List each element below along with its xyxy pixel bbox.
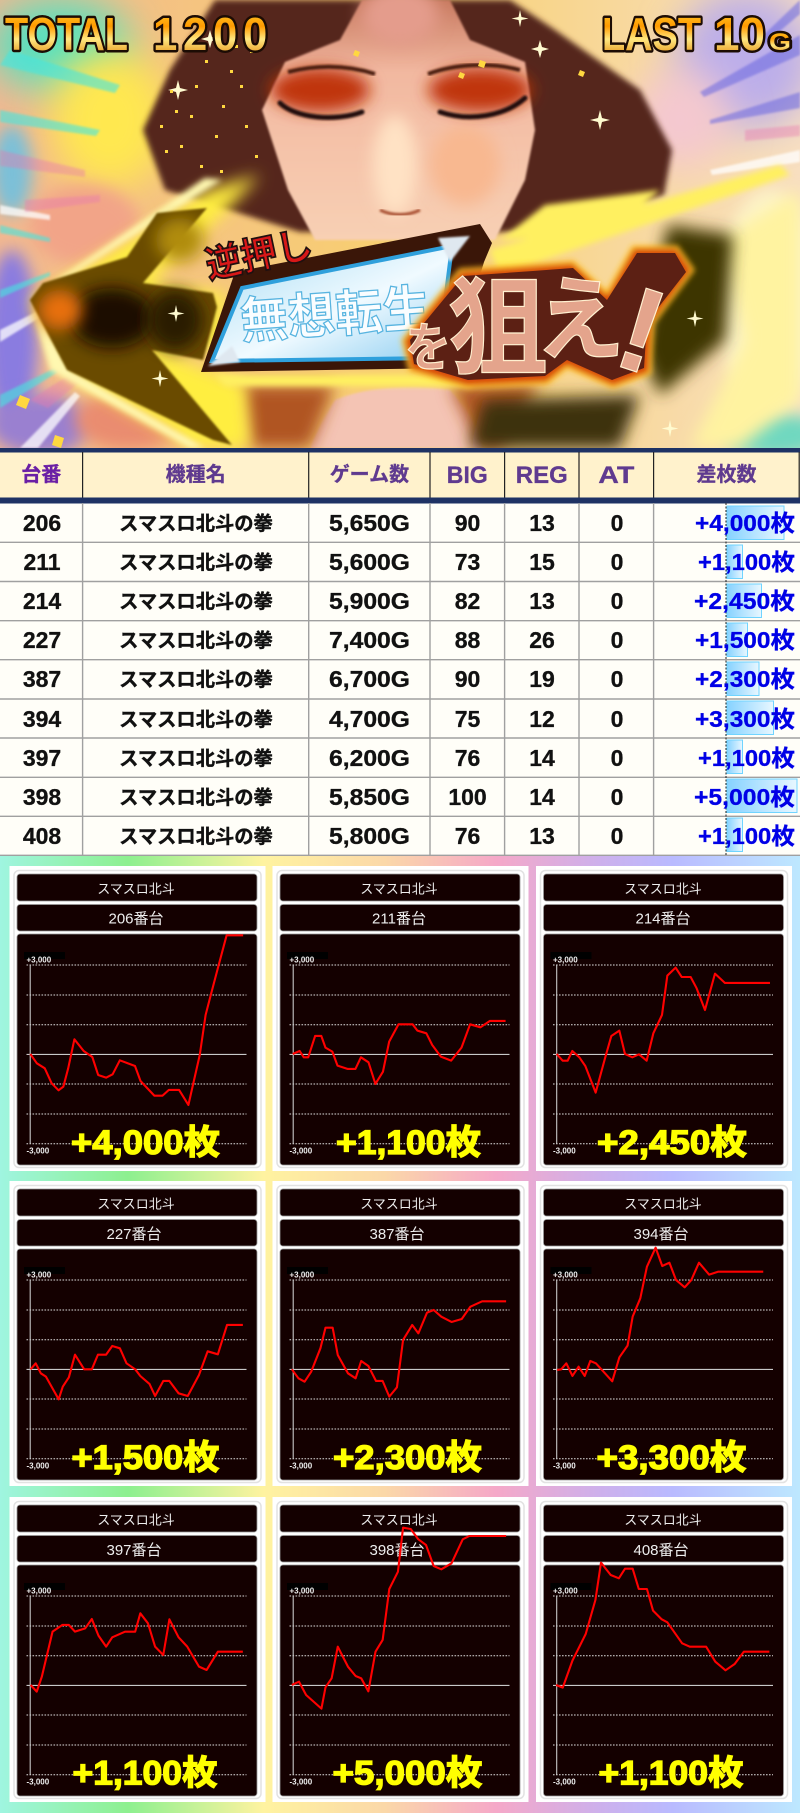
row 397: スマスロ北斗の拳 <box>119 748 273 770</box>
data table <box>0 448 800 856</box>
panel: chart 397: -3,000 <box>26 1778 50 1786</box>
row 398: 0 <box>611 784 623 810</box>
counter: TOTAL 1200: TOTAL <box>5 8 128 60</box>
panel: chart 211 <box>272 866 528 1171</box>
table header: AT <box>598 462 635 489</box>
panel: chart 206: -3,000 <box>26 1146 50 1156</box>
slogan: を狙え!: 狙 <box>448 268 548 389</box>
row 211 <box>23 549 795 575</box>
arrow right side <box>690 190 800 448</box>
row 397: 397 <box>23 745 61 771</box>
row 214: 0 <box>611 588 623 614</box>
row 394: スマスロ北斗の拳 <box>119 709 273 731</box>
panel: chart 394: +3,300枚 <box>596 1439 746 1477</box>
row 387: スマスロ北斗の拳 <box>119 669 273 691</box>
counter: LAST 10G: 10 <box>714 8 765 60</box>
arrow body <box>30 208 232 445</box>
row 211: スマスロ北斗の拳 <box>119 552 273 574</box>
panel: chart 398: +3,000 <box>290 1586 315 1596</box>
row 227: 0 <box>611 627 623 653</box>
row 214: +2,450枚 <box>694 588 795 614</box>
panel: chart 211: +3,000 <box>290 956 315 964</box>
slogan: を狙え! <box>403 247 693 400</box>
panel: chart 408: +1,100枚 <box>598 1754 744 1792</box>
counter: TOTAL 1200 <box>5 8 273 60</box>
row 206: 5,650G <box>329 510 410 536</box>
table header: ゲーム数 <box>330 463 409 486</box>
panel: chart 408: +3,000 <box>553 1586 578 1596</box>
row 227: 88 <box>455 627 480 653</box>
row 214 <box>23 588 795 614</box>
row 397 <box>23 745 795 771</box>
row 206: 0 <box>611 510 623 536</box>
row 227 <box>23 627 795 653</box>
row 206 <box>23 510 795 536</box>
row 408: 76 <box>455 823 480 849</box>
panel: chart 206 <box>10 866 266 1171</box>
row 408 <box>23 823 795 849</box>
row 387 <box>23 666 795 692</box>
sparkles <box>152 10 704 437</box>
row 394: +3,300枚 <box>695 706 795 732</box>
row 211: 0 <box>611 549 623 575</box>
hero artwork <box>0 0 800 457</box>
row 206: 90 <box>455 510 480 536</box>
counter: TOTAL 1200: 1200 <box>153 8 273 60</box>
row 387: 90 <box>455 666 480 692</box>
rays <box>0 0 800 448</box>
row 214: スマスロ北斗の拳 <box>119 591 273 613</box>
panel: chart 206: スマスロ北斗 <box>97 882 175 896</box>
panel: chart 227: -3,000 <box>26 1462 50 1470</box>
row 211: +1,100枚 <box>698 549 795 575</box>
row 206: +4,000枚 <box>695 510 795 536</box>
row 387: +2,300枚 <box>695 666 795 692</box>
row 214: 214 <box>23 588 61 614</box>
panel: chart 214: -3,000 <box>553 1146 576 1156</box>
slogan: を狙え!: を <box>405 320 451 378</box>
panel: chart 211: スマスロ北斗 <box>360 882 438 896</box>
row 408: 0 <box>611 823 623 849</box>
banner: 無想転生 <box>201 224 492 372</box>
panel: chart 397: +3,000 <box>26 1586 52 1596</box>
eyes <box>280 98 525 118</box>
panel: chart 211: +1,100枚 <box>336 1124 481 1162</box>
slogan: を狙え!: え <box>535 270 625 372</box>
panel: chart 214: スマスロ北斗 <box>624 882 702 896</box>
hands <box>310 387 482 448</box>
row 398: 14 <box>529 784 555 810</box>
panel: chart 394: スマスロ北斗 <box>624 1196 702 1212</box>
panel: chart 206: 206番台 <box>108 910 164 928</box>
row 387: 6,700G <box>329 666 410 692</box>
row 397: 0 <box>611 745 623 771</box>
panel: chart 408: スマスロ北斗 <box>624 1512 702 1528</box>
row 211: 5,600G <box>329 549 410 575</box>
panel: chart 397: +1,100枚 <box>72 1754 218 1792</box>
panel: chart 398: -3,000 <box>290 1778 313 1786</box>
counter: LAST 10G <box>602 8 791 60</box>
row 397: 76 <box>455 745 480 771</box>
panel: chart 214 <box>536 866 792 1171</box>
row 227: 227 <box>23 627 61 653</box>
difference bars <box>727 506 797 852</box>
eyebrows <box>288 65 520 74</box>
table grid <box>0 503 800 856</box>
row 214: 5,900G <box>329 588 410 614</box>
row 394: 12 <box>529 706 555 732</box>
row 211: 15 <box>529 549 555 575</box>
panel: chart 227: 227番台 <box>106 1226 162 1243</box>
row 398: スマスロ北斗の拳 <box>119 787 273 809</box>
panel: chart 397: スマスロ北斗 <box>97 1512 175 1528</box>
row 408: 408 <box>23 823 61 849</box>
row 214: 82 <box>455 588 480 614</box>
row 206: スマスロ北斗の拳 <box>119 513 273 535</box>
row 394 <box>23 706 795 732</box>
row 398: 5,850G <box>329 784 410 810</box>
row 394: 75 <box>455 706 480 732</box>
panel: chart 394: -3,000 <box>553 1462 576 1470</box>
row 227: +1,500枚 <box>695 627 795 653</box>
panel: chart 214: 214番台 <box>635 910 691 928</box>
row 408: スマスロ北斗の拳 <box>119 826 273 848</box>
row 394: 0 <box>611 706 623 732</box>
panel: chart 387: +2,300枚 <box>333 1439 482 1477</box>
row 214: 13 <box>529 588 555 614</box>
panel: chart 211: -3,000 <box>290 1146 313 1156</box>
panel: chart 394 <box>536 1181 792 1486</box>
arrow glow <box>30 175 260 448</box>
label: 逆押し: 逆押し <box>202 224 316 288</box>
row 397: 14 <box>529 745 555 771</box>
row 394: 4,700G <box>329 706 410 732</box>
row 387: 0 <box>611 666 623 692</box>
panel: chart 206: +4,000枚 <box>71 1124 220 1162</box>
slogan: を狙え!: ! <box>602 261 681 400</box>
panel: chart 227: +1,500枚 <box>72 1439 220 1477</box>
nose <box>380 210 420 214</box>
panel: chart 398: スマスロ北斗 <box>360 1512 438 1528</box>
panel: chart 387: スマスロ北斗 <box>360 1196 438 1212</box>
panel: chart 408: -3,000 <box>553 1778 576 1786</box>
face <box>262 0 535 240</box>
row 394: 394 <box>23 706 61 732</box>
panel: chart 227: +3,000 <box>26 1270 52 1280</box>
row 227: 7,400G <box>329 627 410 653</box>
row 206: 13 <box>529 510 555 536</box>
table header: BIG <box>447 462 488 489</box>
row 227: 26 <box>529 627 555 653</box>
counter: LAST 10G: G <box>769 29 791 56</box>
row 398: 100 <box>448 784 487 810</box>
panel: chart 408 <box>536 1497 792 1802</box>
panel: chart 398 <box>272 1497 528 1802</box>
table header: 差枚数 <box>696 463 756 486</box>
rainbow background <box>0 856 800 1813</box>
row 408: 13 <box>529 823 555 849</box>
panel: chart 398: 398番台 <box>369 1542 425 1559</box>
panel: chart 227 <box>10 1181 266 1486</box>
row 387: 387 <box>23 666 61 692</box>
panel: chart 211: 211番台 <box>372 910 426 928</box>
table header: REG <box>516 462 568 489</box>
row 211: 73 <box>455 549 480 575</box>
banner: 無想転生: 無想転生 <box>238 280 432 350</box>
row 387: 19 <box>529 666 555 692</box>
table header <box>0 452 800 504</box>
panel: chart 214: +3,000 <box>553 956 578 964</box>
row 227: スマスロ北斗の拳 <box>119 630 273 652</box>
panel: chart 387: -3,000 <box>290 1462 313 1470</box>
table header: 機種名 <box>166 463 226 486</box>
panel: chart 387: 387番台 <box>369 1226 425 1243</box>
hair <box>143 0 672 232</box>
table header: 台番 <box>21 463 61 486</box>
row 397: 6,200G <box>329 745 410 771</box>
panel: chart 227: スマスロ北斗 <box>97 1196 175 1212</box>
panel: chart 398: +5,000枚 <box>332 1754 482 1792</box>
row 398: +5,000枚 <box>694 784 795 810</box>
row 408: 5,800G <box>329 823 410 849</box>
panel: chart 214: +2,450枚 <box>597 1124 747 1162</box>
panel: chart 394: +3,000 <box>553 1270 578 1280</box>
panel: chart 397 <box>10 1497 266 1802</box>
panel: chart 408: 408番台 <box>633 1542 689 1559</box>
row 206: 206 <box>23 510 61 536</box>
row 397: +1,100枚 <box>698 745 795 771</box>
panel: chart 397: 397番台 <box>106 1542 162 1559</box>
row 398: 398 <box>23 784 61 810</box>
row 211: 211 <box>23 549 61 575</box>
panel: chart 387 <box>272 1181 528 1486</box>
row 408: +1,100枚 <box>698 823 795 849</box>
row 398 <box>23 784 795 810</box>
panel: chart 387: +3,000 <box>290 1270 315 1280</box>
panel: chart 394: 394番台 <box>633 1226 689 1243</box>
panel: chart 206: +3,000 <box>26 956 52 964</box>
counter: LAST 10G: LAST <box>602 8 701 60</box>
